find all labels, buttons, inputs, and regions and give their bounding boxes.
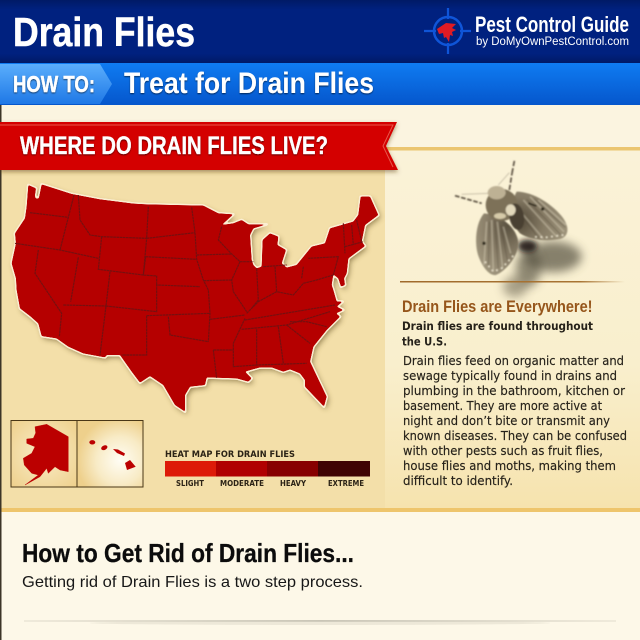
- inset: Alaska: [11, 420, 77, 487]
- how-to band: HOW TO:: [13, 71, 95, 97]
- inset: Alaska and Hawaii: [11, 420, 143, 487]
- info body text: with other pests such as fruit flies,: [403, 443, 603, 458]
- icon: crosshair with fly: [424, 8, 471, 54]
- gold rules: [385, 147, 640, 150]
- logo: Pest Control Guide: by DoMyOwnPestControl.com: [476, 36, 629, 48]
- info body text: difficult to identify.: [403, 473, 513, 488]
- section intro: Getting rid of Drain Flies is a two step process.: [22, 574, 363, 591]
- legend: heat map: [165, 450, 370, 488]
- legend labels: SLIGHT: [176, 479, 204, 488]
- section: how to get rid: [22, 538, 363, 591]
- legend labels: EXTREME: [328, 479, 364, 488]
- title: Drain Flies: [13, 9, 195, 55]
- map of contiguous US: [12, 184, 380, 414]
- info body text: plumbing in the bathroom, kitchen or: [403, 383, 626, 398]
- how-to tab: [0, 64, 112, 104]
- section heading: How to Get Rid of Drain Flies...: [22, 538, 354, 568]
- logo: Pest Control Guide: [424, 8, 629, 54]
- banner: where do drain flies live: WHERE DO DRAIN FLIES LIVE?: [20, 132, 328, 160]
- info body text: Drain flies feed on organic matter and: [403, 353, 624, 368]
- info body text: house flies and moths, making them: [403, 458, 616, 473]
- info body text: sewage typically found in drains and: [403, 368, 617, 383]
- header bar: [0, 0, 640, 63]
- info body text: night and don’t bite or transmit any: [403, 413, 611, 428]
- panel: map: [0, 148, 385, 508]
- how-to heading: Treat for Drain Flies: [124, 67, 374, 100]
- banner: where do drain flies live: [0, 122, 398, 170]
- divider: [24, 620, 616, 625]
- legend labels: MODERATE: [220, 479, 264, 488]
- legend labels: HEAVY: [280, 479, 306, 488]
- icon: drain fly photo: [455, 159, 582, 297]
- cream strip under header: [0, 105, 640, 148]
- info body text: [403, 353, 627, 488]
- rule: [400, 281, 625, 282]
- info subheading: [402, 319, 593, 348]
- legend swatches: [165, 461, 370, 476]
- inset: Hawaii: [77, 420, 143, 487]
- info subheading: Drain flies are found throughout: [402, 319, 593, 333]
- legend: heat map: HEAT MAP FOR DRAIN FLIES: [165, 450, 295, 460]
- info heading: Drain Flies are Everywhere!: [402, 297, 592, 316]
- how-to band: [0, 63, 640, 105]
- panel: info: [385, 150, 640, 508]
- legend labels: [176, 479, 364, 488]
- info subheading: the U.S.: [402, 334, 447, 348]
- info body text: basement. They are more active at: [403, 398, 602, 413]
